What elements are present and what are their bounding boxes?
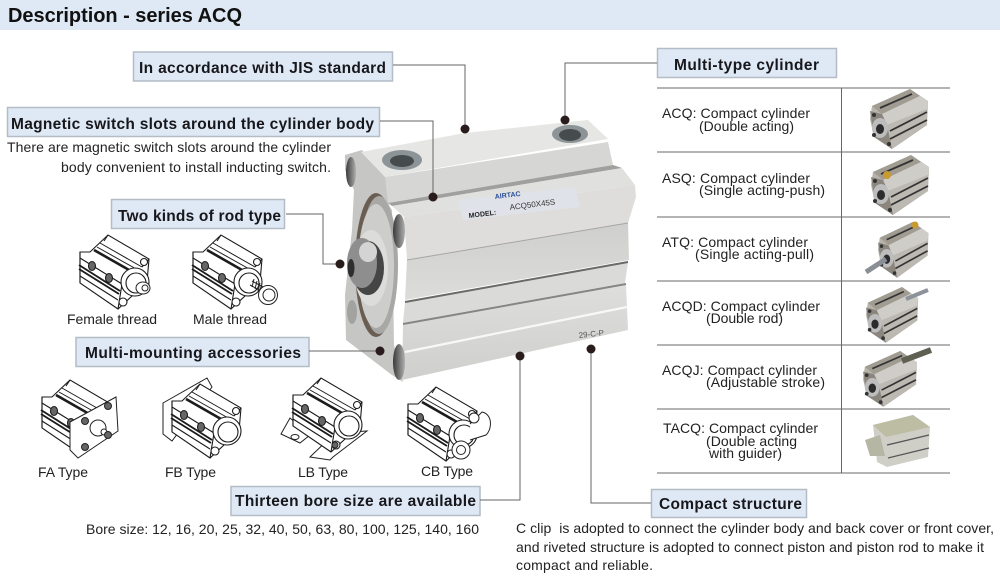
row: ACQ: ACQ: Compact cylinder bbox=[662, 105, 810, 121]
callout: rod type bbox=[112, 200, 344, 268]
main cylinder photo: AIRTAC bbox=[494, 191, 521, 201]
piston rod nut bbox=[352, 241, 384, 295]
callout: rod type: Two kinds of rod type bbox=[118, 208, 281, 225]
flange ring bbox=[355, 193, 397, 337]
row: TACQ: TACQ: Compact cylinder bbox=[663, 420, 818, 436]
row: ATQ: (Single acting-pull) bbox=[695, 246, 814, 262]
text: compact structure description: C clip is adopted to connect the cylinder body and back cover or front cover, bbox=[516, 520, 994, 536]
callout: magnetic switch slots: Magnetic switch slots around the cylinder body bbox=[11, 116, 374, 133]
title: Description - series ACQ bbox=[8, 5, 242, 27]
caption: LB type: LB Type bbox=[298, 464, 348, 480]
row: ACQD bbox=[662, 287, 928, 343]
row: TACQ bbox=[663, 415, 930, 467]
row: ACQJ: (Adjustable stroke) bbox=[706, 374, 825, 390]
row: ATQ bbox=[662, 222, 928, 278]
row: ACQJ: ACQJ: Compact cylinder bbox=[662, 362, 817, 378]
icon: FA type bbox=[41, 380, 118, 458]
row: ACQJ bbox=[662, 350, 931, 407]
callout: JIS standard: In accordance with JIS standard bbox=[139, 60, 386, 77]
ports bbox=[382, 150, 422, 170]
icon: CB type bbox=[407, 387, 491, 461]
row: ACQ: (Double acting) bbox=[699, 118, 794, 134]
row: ACQD: (Double rod) bbox=[706, 310, 783, 326]
row: TACQ: (Double acting bbox=[706, 433, 797, 449]
caption: FB type: FB Type bbox=[165, 464, 216, 480]
caption: CB type: CB Type bbox=[421, 463, 473, 479]
text: magnetic switch description bbox=[7, 139, 331, 175]
caption: female thread: Female thread bbox=[67, 311, 157, 327]
callout: mounting accessories: Multi-mounting accessories bbox=[85, 345, 301, 362]
callout: multi-type cylinder bbox=[560, 48, 836, 124]
header band bbox=[0, 0, 1000, 30]
row: TACQ: with guider) bbox=[708, 445, 782, 461]
callout: bore sizes: Thirteen bore size are available bbox=[235, 493, 476, 510]
main cylinder photo: 29-C-P bbox=[578, 328, 604, 340]
icon: female thread bbox=[79, 235, 150, 309]
table: cylinder types bbox=[657, 88, 950, 473]
callout: magnetic switch slots bbox=[8, 108, 438, 202]
row: ASQ: (Single acting-push) bbox=[699, 182, 825, 198]
main cylinder photo bbox=[345, 120, 636, 382]
caption: male thread: Male thread bbox=[193, 311, 267, 327]
text: magnetic switch description: body convenient to install inducting switch. bbox=[61, 159, 331, 175]
callout: compact structure bbox=[586, 344, 806, 518]
icon: LB type bbox=[281, 378, 367, 460]
model plate bbox=[458, 187, 580, 220]
main cylinder photo: MODEL: bbox=[468, 210, 497, 220]
callout: multi-type cylinder: Multi-type cylinder bbox=[674, 57, 819, 74]
callout: compact structure: Compact structure bbox=[659, 496, 802, 513]
row: ACQD: ACQD: Compact cylinder bbox=[662, 298, 820, 314]
callout: mounting accessories bbox=[76, 338, 384, 366]
row: ATQ: ATQ: Compact cylinder bbox=[662, 234, 808, 250]
icon: male thread bbox=[192, 235, 278, 309]
caption: FA type: FA Type bbox=[38, 464, 88, 480]
row: ACQ bbox=[662, 89, 928, 149]
main cylinder photo: ACQ50X45S bbox=[509, 197, 556, 212]
callout: bore sizes bbox=[231, 352, 524, 516]
text: bore size list: Bore size: 12, 16, 20, 25, 32, 40, 50, 63, 80, 100, 125, 140, 160 bbox=[86, 521, 479, 537]
callout: JIS standard bbox=[134, 52, 470, 134]
row: ASQ bbox=[662, 155, 929, 215]
icon: FB type bbox=[163, 378, 241, 458]
text: compact structure description: compact and reliable. bbox=[516, 557, 653, 573]
text: magnetic switch description: There are magnetic switch slots around the cylinder bbox=[7, 139, 331, 155]
text: compact structure description bbox=[516, 520, 994, 573]
mounting holes bbox=[346, 157, 356, 187]
row: ASQ: ASQ: Compact cylinder bbox=[662, 170, 810, 186]
text: compact structure description: and riveted structure is adopted to connect piston and piston rod to make it bbox=[516, 539, 984, 555]
